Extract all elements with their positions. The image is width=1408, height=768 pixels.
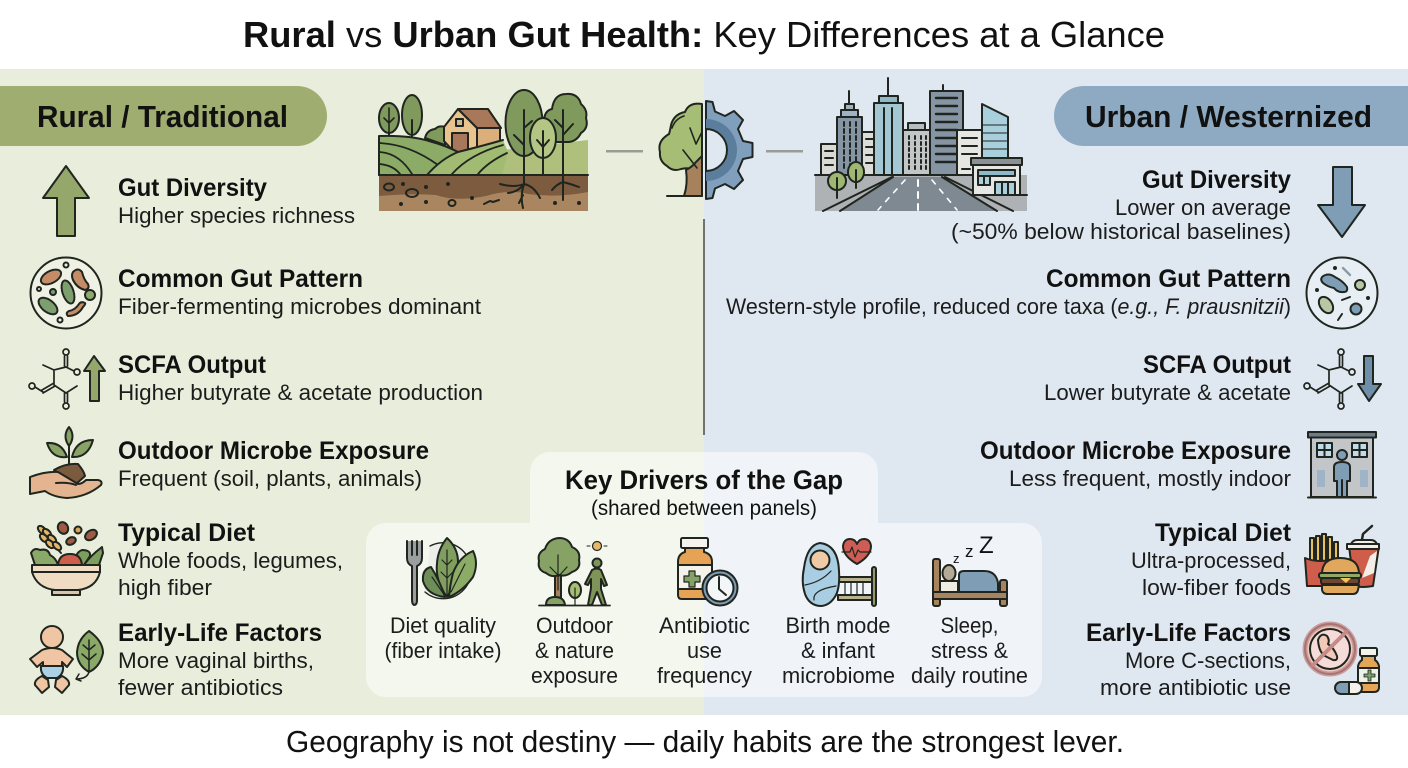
row: rural SCFA output: Higher butyrate & acetate production (118, 380, 483, 405)
row: rural early-life factors: Early-Life Factors (118, 619, 322, 647)
driver: outdoor and nature (531, 538, 618, 688)
driver: sleep and stress: Sleep, (940, 613, 998, 638)
icon: person sleeping in bed (933, 532, 1007, 606)
row: rural gut diversity: Higher species richness (118, 203, 355, 228)
title: Rural vs Urban Gut Health: Key Differences at a Glance (243, 14, 1165, 55)
row: urban gut diversity (951, 166, 1365, 244)
row: urban typical diet: low-fiber foods (1142, 575, 1291, 600)
icon: hand holding seedling (30, 427, 102, 498)
row: urban SCFA output: SCFA Output (1143, 351, 1292, 379)
icon: down arrow (1318, 167, 1365, 237)
subheading: (shared between panels) (591, 497, 817, 520)
icon: pill bottle and clock (678, 538, 738, 606)
driver: antibiotic use: Antibiotic (659, 613, 750, 638)
icon: no c-section with medication (1305, 624, 1379, 694)
row: urban gut pattern: Western-style profile, reduced core taxa (e.g., F. prausnitzii) (726, 294, 1291, 319)
illustration: farm landscape (379, 90, 588, 211)
row: urban SCFA output: Lower butyrate & acetate (1044, 380, 1291, 405)
icon: baby and leaf (30, 626, 103, 693)
icon: up arrow (43, 166, 89, 236)
icon: tree and walking person (539, 538, 610, 606)
divider (703, 219, 705, 435)
row: urban early-life factors (1086, 619, 1379, 700)
icon: person sleeping in bed: Z (979, 532, 994, 559)
panel: key drivers (366, 452, 1042, 697)
heading: key drivers: Key Drivers of the Gap (565, 465, 843, 495)
icon: fiber microbes (30, 258, 102, 328)
row: urban gut diversity: Lower on average (1115, 195, 1291, 220)
driver: antibiotic use: use (687, 638, 722, 663)
heading: urban pill: Urban / Westernized (1085, 99, 1372, 134)
driver: diet quality (384, 538, 502, 663)
icon: tree and gear (659, 101, 752, 199)
row: rural gut pattern (30, 258, 481, 328)
heading: rural pill: Rural / Traditional (37, 99, 288, 134)
row: urban gut diversity: Gut Diversity (1142, 166, 1291, 194)
connector dash left (606, 150, 643, 152)
row: rural early-life factors: More vaginal births, (118, 648, 314, 673)
row: urban gut diversity: (~50% below historical baselines) (951, 219, 1291, 244)
row: rural typical diet: high fiber (118, 575, 212, 600)
row: urban typical diet: Typical Diet (1155, 519, 1292, 547)
icon: person sleeping in bed: z (965, 542, 974, 561)
row: urban early-life factors: More C-sections, (1125, 648, 1291, 673)
row: rural gut pattern: Common Gut Pattern (118, 265, 363, 293)
row: rural outdoor exposure: Outdoor Microbe Exposure (118, 437, 429, 465)
icon: salad bowl (31, 520, 103, 595)
driver: diet quality: Diet quality (390, 613, 496, 638)
footer takeaway: Geography is not destiny — daily habits are the strongest lever. (286, 724, 1124, 759)
driver: birth mode (782, 539, 895, 688)
row: rural typical diet: Typical Diet (118, 519, 256, 547)
row: rural gut diversity: Gut Diversity (118, 174, 267, 202)
panel: rural background (0, 69, 704, 715)
driver: outdoor and nature: Outdoor (536, 613, 613, 638)
row: urban typical diet: Ultra-processed, (1131, 548, 1291, 573)
panel: urban background (704, 69, 1408, 715)
icon: fork and leafy greens (407, 538, 476, 605)
illustration: city skyline (815, 78, 1027, 211)
driver: birth mode: microbiome (782, 663, 895, 688)
row: urban early-life factors: more antibiotic use (1100, 675, 1291, 700)
row: urban outdoor exposure (980, 432, 1376, 498)
icon: indoor building (1308, 432, 1376, 498)
driver: antibiotic use: frequency (657, 663, 752, 688)
driver: outdoor and nature: & nature (535, 638, 614, 663)
heading: rural pill (0, 86, 327, 146)
driver: antibiotic use (657, 538, 752, 688)
driver: birth mode: & infant (801, 638, 875, 663)
icon: molecule with down arrow (1304, 349, 1381, 409)
heading: urban pill (1054, 86, 1408, 146)
driver: diet quality: (fiber intake) (384, 638, 502, 663)
driver: sleep and stress: stress & (931, 638, 1008, 663)
row: rural typical diet (31, 519, 343, 600)
row: urban outdoor exposure: Outdoor Microbe Exposure (980, 437, 1291, 465)
row: urban SCFA output (1044, 349, 1381, 409)
icon: fast food (1305, 526, 1379, 594)
row: rural SCFA output: SCFA Output (118, 351, 267, 379)
row: rural outdoor exposure: Frequent (soil, plants, animals) (118, 466, 422, 491)
connector dash right (766, 150, 803, 152)
row: rural early-life factors (30, 619, 322, 700)
driver: outdoor and nature: exposure (531, 663, 618, 688)
icon: swaddled baby, crib and heart (803, 539, 876, 606)
row: rural outdoor exposure (30, 427, 429, 498)
icon: reduced microbes (1306, 258, 1378, 328)
driver: sleep and stress: daily routine (911, 663, 1028, 688)
driver: birth mode: Birth mode (786, 613, 890, 638)
row: rural gut diversity (43, 166, 355, 236)
driver: sleep and stress (911, 532, 1028, 688)
row: urban gut pattern: Common Gut Pattern (1046, 265, 1291, 293)
row: urban outdoor exposure: Less frequent, mostly indoor (1009, 466, 1291, 491)
row: rural SCFA output (29, 349, 483, 409)
row: urban gut pattern (726, 258, 1378, 328)
row: rural early-life factors: fewer antibiotics (118, 675, 283, 700)
icon: molecule with up arrow (29, 349, 105, 409)
row: rural gut pattern: Fiber-fermenting microbes dominant (118, 294, 481, 319)
row: urban early-life factors: Early-Life Factors (1086, 619, 1291, 647)
row: rural typical diet: Whole foods, legumes, (118, 548, 343, 573)
row: urban typical diet (1131, 519, 1379, 600)
icon: person sleeping in bed: z (953, 551, 960, 566)
